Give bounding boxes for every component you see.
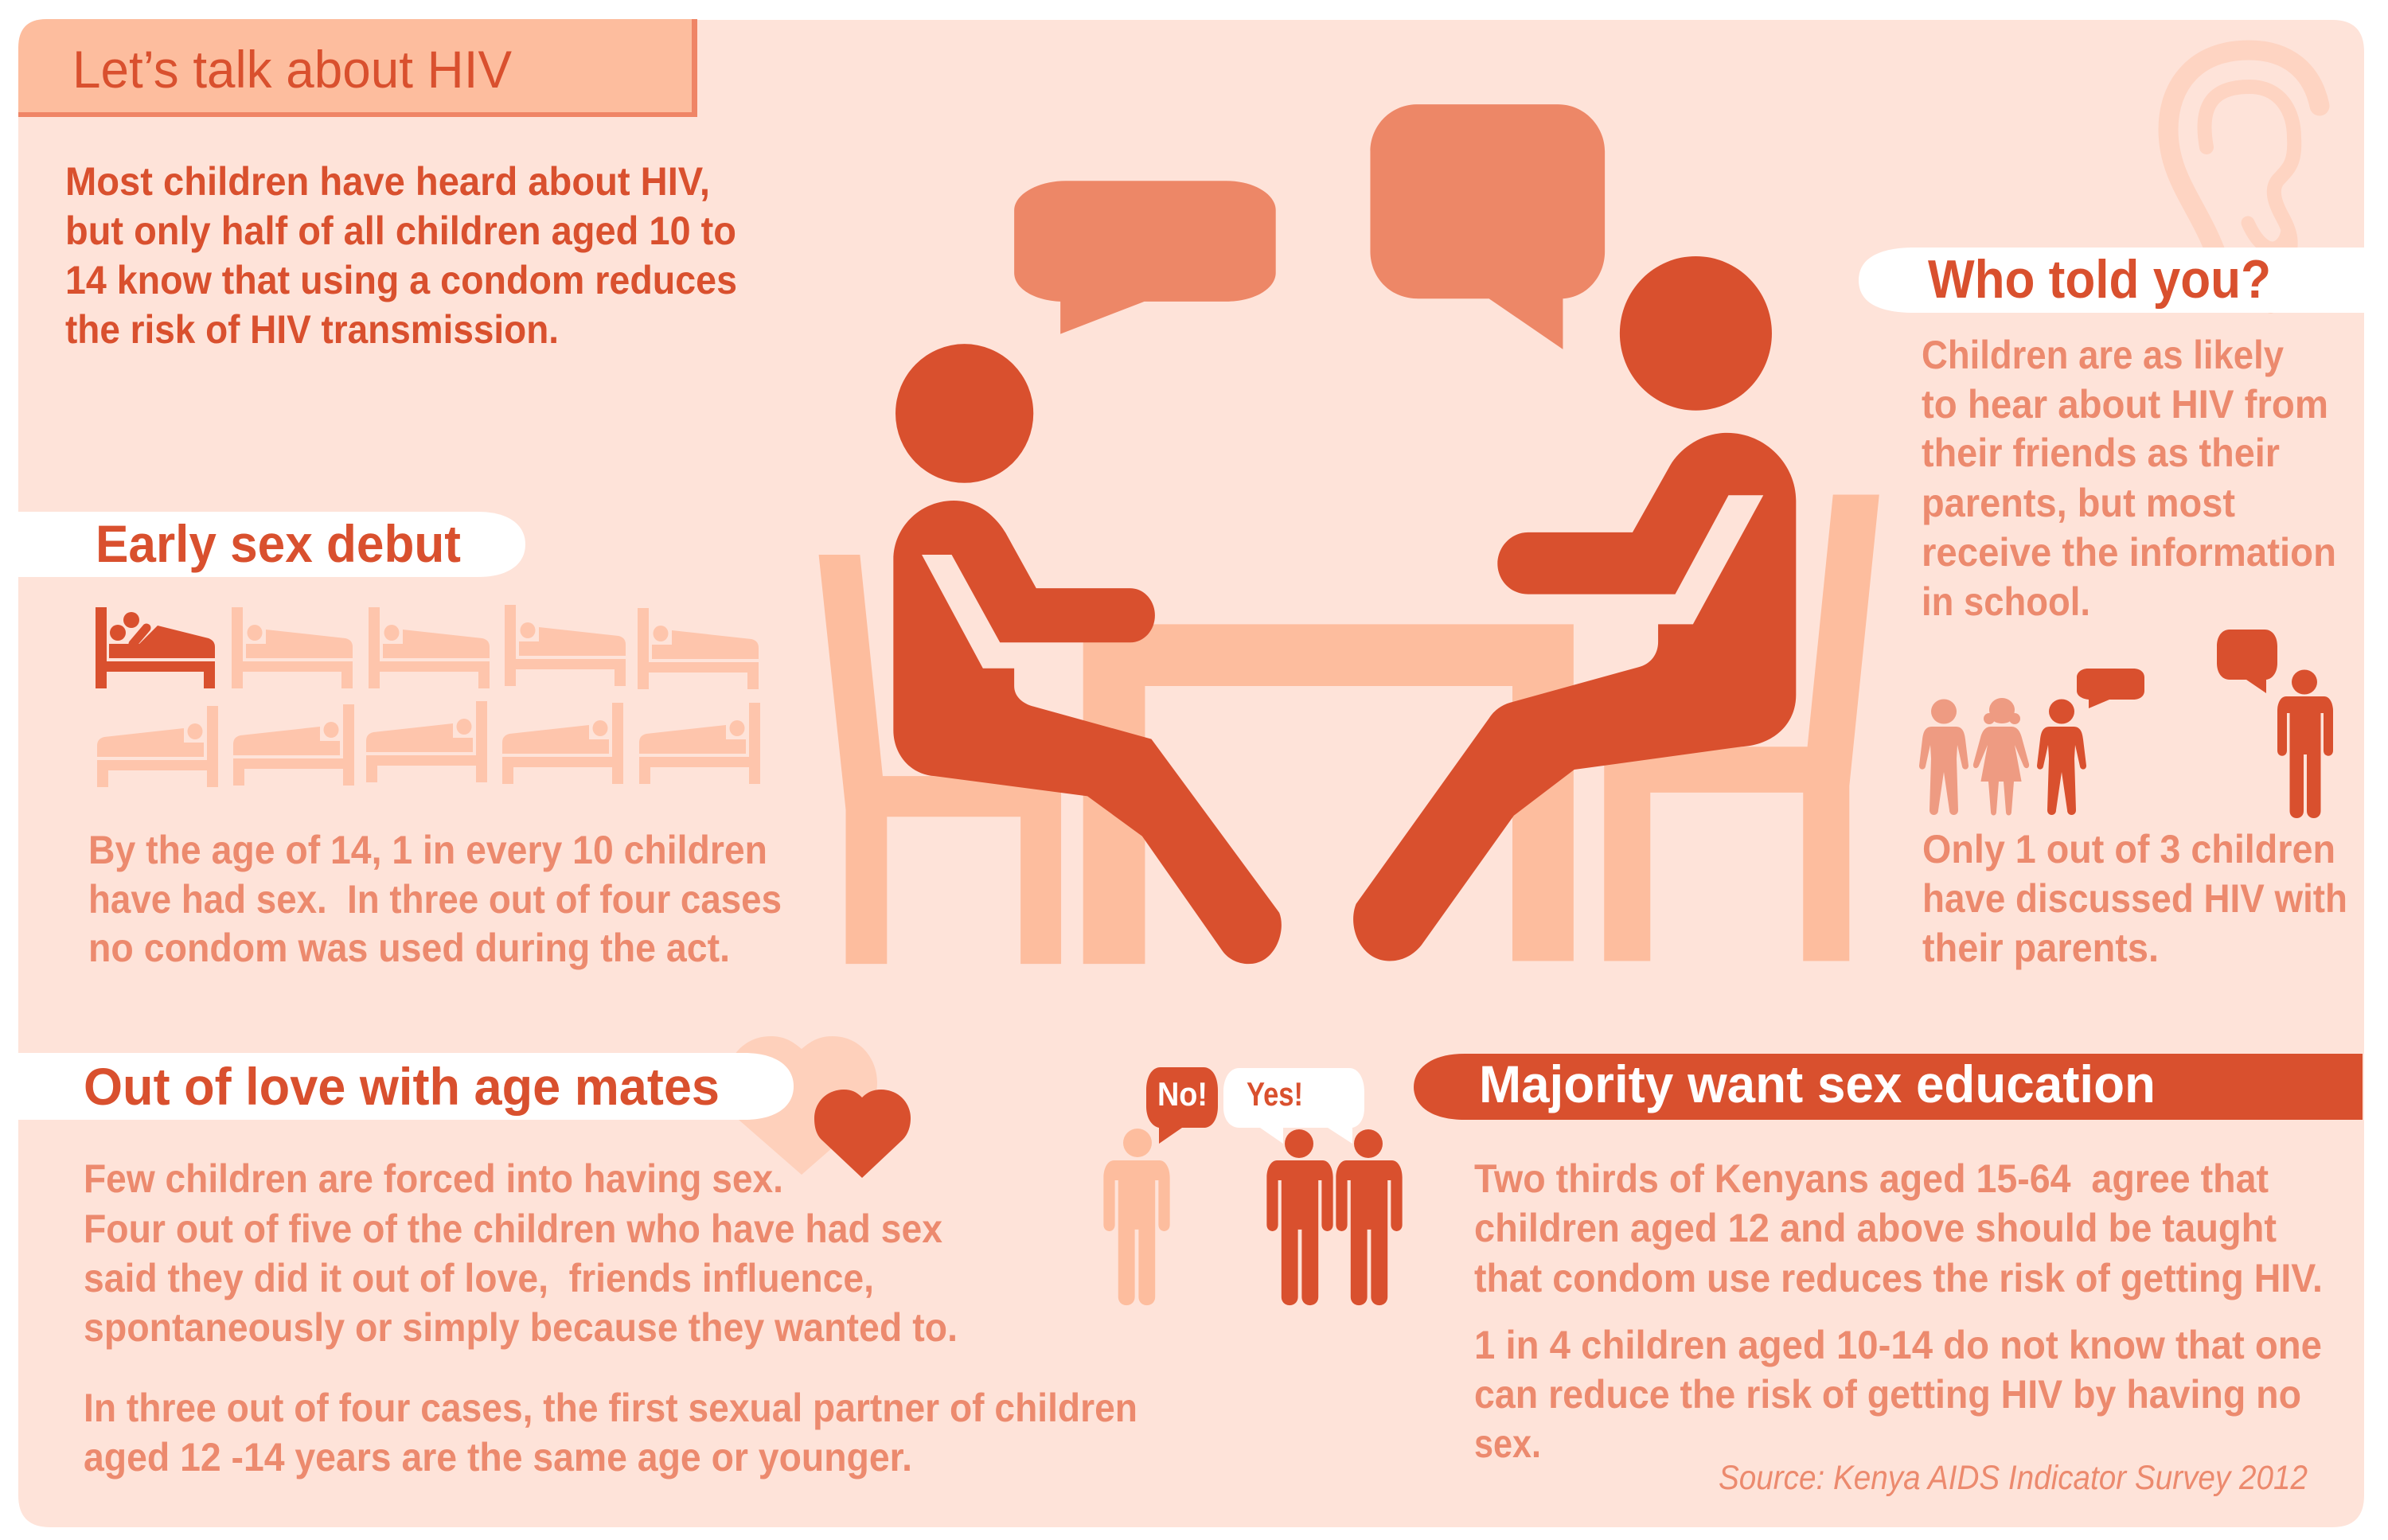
heading pill: early sex debut: Early sex debut (96, 514, 461, 573)
icon: people saying yes: Yes! (1247, 1075, 1303, 1113)
icon: person saying no (1103, 1067, 1218, 1305)
icon: people saying yes (1223, 1068, 1403, 1305)
icons: no and yes people (1103, 1067, 1403, 1305)
text: age mates (84, 1156, 1137, 1480)
text: parents (1922, 827, 2347, 970)
intro text: 14 know that using a condom reduces (65, 258, 737, 302)
heading pill: who told you: Who told you? (1928, 249, 2271, 310)
icon: person saying no: No! (1157, 1075, 1208, 1113)
intro text: the risk of HIV transmission. (65, 307, 559, 352)
text: who told you: their friends as their (1922, 431, 2280, 475)
text: early sex debut: no condom was used during the act. (88, 926, 730, 970)
text: age mates: spontaneously or simply because they wanted to. (84, 1305, 958, 1350)
right chair (1604, 495, 1879, 961)
icon: boy (1919, 699, 1969, 815)
panel: majority want sex education (1414, 1054, 2363, 1497)
icon: light heart (726, 1036, 877, 1175)
intro text: Most children have heard about HIV, (65, 159, 710, 204)
text: age mates: Four out of five of the children who have had sex (84, 1207, 942, 1251)
text: sex education: sex. (1474, 1421, 1541, 1466)
icon: dark heart (814, 1090, 911, 1178)
text: age mates: In three out of four cases, the first sexual partner of children (84, 1386, 1137, 1430)
icon: talking parent (2217, 630, 2333, 818)
icons: children and parents talking (1919, 630, 2333, 818)
source note: Source: Kenya AIDS Indicator Survey 2012 (1719, 1459, 2308, 1497)
text: sex education (1474, 1156, 2323, 1466)
panel: early sex debut (18, 512, 782, 970)
panel: who told you (1859, 248, 2364, 970)
text: who told you: receive the information (1922, 530, 2336, 575)
icon: occupied bed (96, 607, 215, 688)
heading pill: sex education: Majority want sex education (1479, 1055, 2156, 1113)
text: who told you (1922, 333, 2336, 624)
text: early sex debut (88, 828, 782, 970)
left speech bubble (1014, 181, 1276, 334)
text: age mates: aged 12 -14 years are the same age or younger. (84, 1435, 912, 1480)
bed icons: one in ten (96, 605, 760, 787)
text: parents: their parents. (1922, 926, 2159, 970)
text: parents: Only 1 out of 3 children (1922, 827, 2335, 871)
text: sex education: can reduce the risk of getting HIV by having no (1474, 1372, 2301, 1417)
title banner (18, 19, 697, 117)
text: sex education: that condom use reduces the risk of getting HIV. (1474, 1256, 2323, 1300)
heading pill: age mates: Out of love with age mates (84, 1057, 720, 1116)
text: who told you: Children are as likely (1922, 333, 2284, 377)
icon: empty beds (97, 605, 760, 787)
right speech bubble (1370, 104, 1605, 349)
text: sex education: Two thirds of Kenyans aged 15-64 agree that (1474, 1156, 2269, 1201)
left chair (819, 555, 1061, 964)
intro text: but only half of all children aged 10 to (65, 209, 736, 253)
text: early sex debut: By the age of 14, 1 in every 10 children (88, 828, 767, 872)
icon: girl (1973, 698, 2029, 815)
title text: Let’s talk about HIV (72, 40, 512, 99)
intro text (65, 159, 737, 352)
text: sex education: 1 in 4 children aged 10-14 do not know that one (1474, 1323, 2322, 1367)
heading pill: sex education (1414, 1054, 2363, 1120)
table (1083, 624, 1574, 964)
right person (1353, 256, 1796, 961)
text: who told you: parents, but most (1922, 481, 2235, 525)
text: age mates: Few children are forced into having sex. (84, 1156, 783, 1201)
central illustration: two people talking at a table (819, 104, 1879, 964)
text: parents: have discussed HIV with (1922, 876, 2347, 921)
icon: ear (2168, 50, 2320, 306)
heading pill: early sex debut (18, 512, 525, 577)
text: who told you: in school. (1922, 579, 2090, 624)
text: who told you: to hear about HIV from (1922, 382, 2328, 427)
icon: talking child (2037, 669, 2144, 815)
text: age mates: said they did it out of love, friends influence, (84, 1256, 874, 1300)
panel: out of love with age mates (18, 1036, 1137, 1480)
text: early sex debut: have had sex. In three out of four cases (88, 877, 782, 922)
left person (893, 344, 1282, 964)
text: sex education: children aged 12 and above should be taught (1474, 1206, 2277, 1250)
heading pill: who told you (1859, 248, 2364, 313)
